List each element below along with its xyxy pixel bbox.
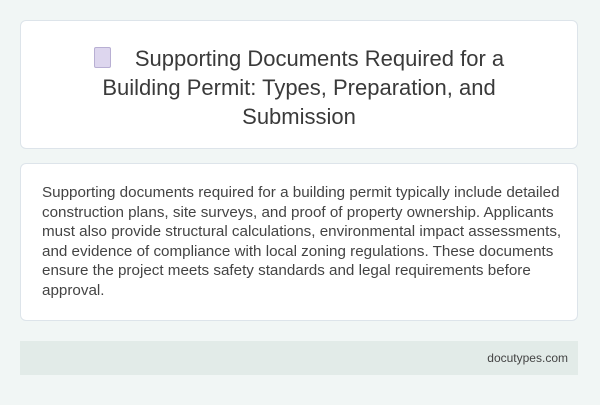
description panel (20, 163, 578, 321)
title panel (20, 20, 578, 149)
title: Supporting Documents Required for a Building Permit: Types, Preparation, and Submission (102, 46, 504, 129)
footer (20, 341, 578, 375)
footer text: docutypes.com (487, 351, 568, 365)
description text: Supporting documents required for a building permit typically include detailed construction plans, site surveys, and proof of property ownership. Applicants must also provide structural calculations, environmental impact assessments, and evidence of compliance with local zoning regulations. These documents ensure the project meets safety standards and legal requirements before approval. (42, 184, 561, 298)
icon: document (94, 47, 111, 68)
